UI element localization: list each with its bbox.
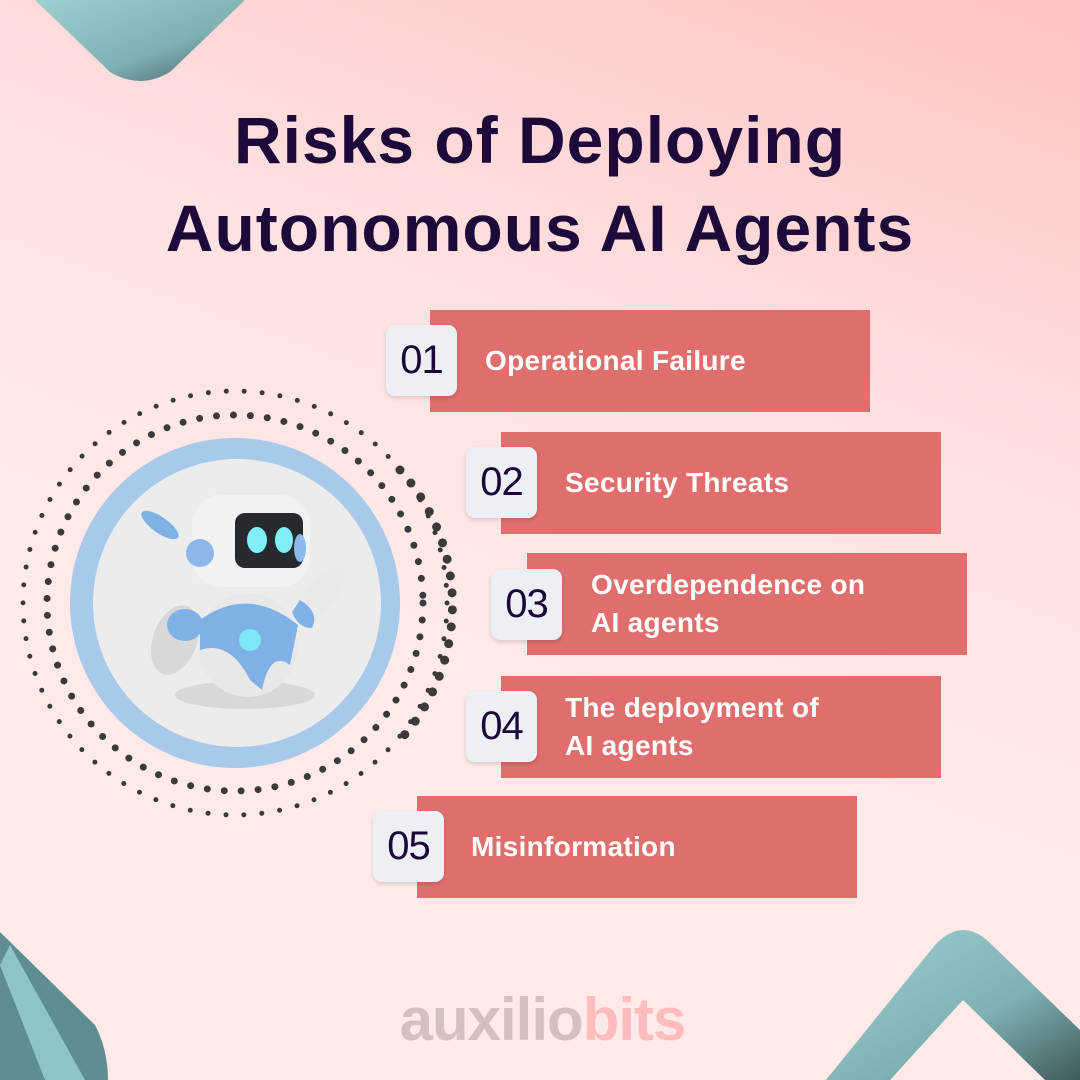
title: Autonomous AI Agents — [166, 191, 914, 265]
item 04: The deployment of — [565, 692, 819, 723]
robot — [137, 506, 183, 544]
item 05: 05 — [387, 824, 430, 868]
item 05 — [372, 796, 857, 898]
illustration: robot in circle with dot rings — [20, 388, 457, 818]
item 02: 02 — [480, 460, 523, 504]
title — [166, 103, 914, 265]
item 05: Misinformation — [471, 831, 676, 862]
item 03: 03 — [505, 582, 548, 626]
item 04 — [464, 676, 941, 778]
item 02 — [464, 432, 941, 534]
item 04: AI agents — [565, 730, 694, 761]
title: Risks of Deploying — [234, 103, 846, 177]
item 03: AI agents — [591, 607, 720, 638]
item 04: 04 — [480, 704, 523, 748]
item 01: Operational Failure — [485, 345, 746, 376]
item 01 — [384, 310, 870, 412]
item 03: Overdependence on — [591, 569, 865, 600]
item 01: 01 — [400, 338, 443, 382]
logo: auxiliobits — [400, 986, 685, 1053]
item 03 — [490, 553, 967, 655]
item 02: Security Threats — [565, 467, 789, 498]
